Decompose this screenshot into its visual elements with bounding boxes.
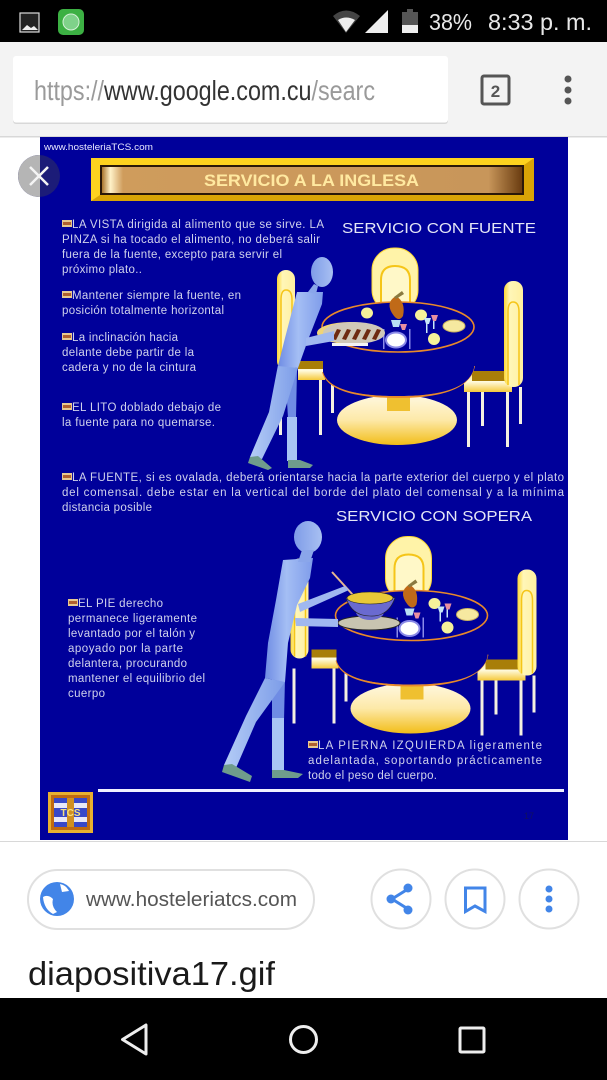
share button [372, 870, 430, 928]
icon: signal [365, 10, 388, 33]
logo [48, 792, 93, 833]
text block: el pie [68, 598, 205, 700]
icon: back [122, 1025, 146, 1054]
icon: recents [460, 1028, 484, 1052]
platter [317, 322, 385, 346]
footer rule [98, 789, 564, 792]
text block: el pie: mantener el equilibrio del [68, 673, 205, 685]
waiter with platter [248, 257, 385, 470]
divider [0, 841, 607, 842]
text block: el lito [62, 402, 221, 429]
icon: image notification [20, 13, 39, 32]
text block: el lito: EL LITO doblado debajo de [72, 402, 221, 414]
logo: TCS [60, 808, 81, 819]
heading: servicio con sopera: SERVICIO CON SOPERA [336, 508, 532, 525]
slide panel [40, 137, 568, 840]
navigation bar [0, 998, 607, 1080]
text block: mantener [62, 290, 241, 317]
text block: inclinacion: delante debe partir de la [62, 347, 195, 359]
icon: wifi [333, 10, 360, 33]
icon: menu dots [564, 76, 572, 104]
text block: inclinacion: La inclinación hacia [72, 332, 179, 344]
icon: tab counter [482, 76, 509, 104]
source url: www.hosteleriaTCS.com [43, 142, 153, 153]
icon: globe [40, 882, 74, 916]
source name: www.hosteleriatcs.com [85, 889, 297, 911]
browser toolbar [0, 42, 607, 138]
text block: inclinacion [62, 332, 197, 374]
text block: la vista: LA VISTA dirigida al alimento que se sirve. LA [72, 219, 324, 231]
illustration: table with fuente [248, 248, 523, 470]
file name: diapositiva17.gif [28, 955, 276, 992]
address box [13, 56, 448, 122]
text block: la pierna: adelantada, soportando prácticamente [308, 755, 542, 767]
text block: la pierna: LA PIERNA IZQUIERDA ligeramente [318, 740, 542, 752]
spoon [332, 572, 353, 595]
platter and tureen [338, 592, 400, 630]
text block: la fuente: LA FUENTE, si es ovalada, deberá orientarse hacia la parte exterior del cuerpo y el plato [72, 472, 564, 484]
text block: la fuente: del comensal. debe estar en la vertical del borde del plato del comensal y a la mínima [62, 487, 565, 499]
text block: la fuente: distancia posible [62, 502, 152, 514]
url text: https://www.google.com.cu/searc [34, 75, 375, 106]
battery percent: 38% [429, 9, 472, 35]
illustration: table with sopera [222, 521, 536, 782]
heading: servicio con fuente: SERVICIO CON FUENTE [342, 220, 536, 237]
title banner [91, 158, 534, 201]
text block: inclinacion: cadera y no de la cintura [62, 362, 197, 374]
bookmark button [446, 870, 504, 928]
close button [18, 155, 60, 197]
text block: el pie: permanece ligeramente [68, 613, 197, 625]
icon: green app [58, 9, 84, 35]
text block: mantener: Mantener siempre la fuente, en [72, 290, 241, 302]
text block: el pie: levantado por el talón y [68, 628, 195, 640]
title banner: SERVICIO A LA INGLESA [204, 172, 419, 190]
more button [520, 870, 578, 928]
text block: la vista: PINZA si ha tocado el alimento, no deberá salir [62, 234, 320, 246]
status bar [0, 0, 607, 42]
text block: la fuente [62, 472, 565, 514]
text block: el pie: apoyado por la parte [68, 643, 183, 655]
icon: wifi inner [338, 18, 355, 32]
clock: 8:33 p. m. [488, 9, 592, 35]
text block: mantener: posición totalmente horizontal [62, 305, 224, 317]
text block: el pie: cuerpo [68, 688, 105, 700]
icon: battery [402, 9, 418, 33]
text block: la pierna: todo el peso del cuerpo. [308, 770, 437, 782]
icon: tab counter: 2 [491, 82, 500, 101]
waiter with soup tureen [222, 521, 400, 782]
text block: la vista: fuera de la fuente, excepto para servir el [62, 249, 282, 261]
text block: la pierna [308, 740, 542, 782]
text block: la vista: próximo plato.. [62, 264, 142, 276]
source pill [28, 870, 314, 929]
page number mark: 17 [524, 811, 534, 821]
text block: la vista [62, 219, 324, 276]
text block: el lito: la fuente para no quemarse. [62, 417, 215, 429]
text block: el pie: EL PIE derecho [78, 598, 163, 610]
text block: el pie: delantera, procurando [68, 658, 187, 670]
icon: home [290, 1026, 316, 1052]
